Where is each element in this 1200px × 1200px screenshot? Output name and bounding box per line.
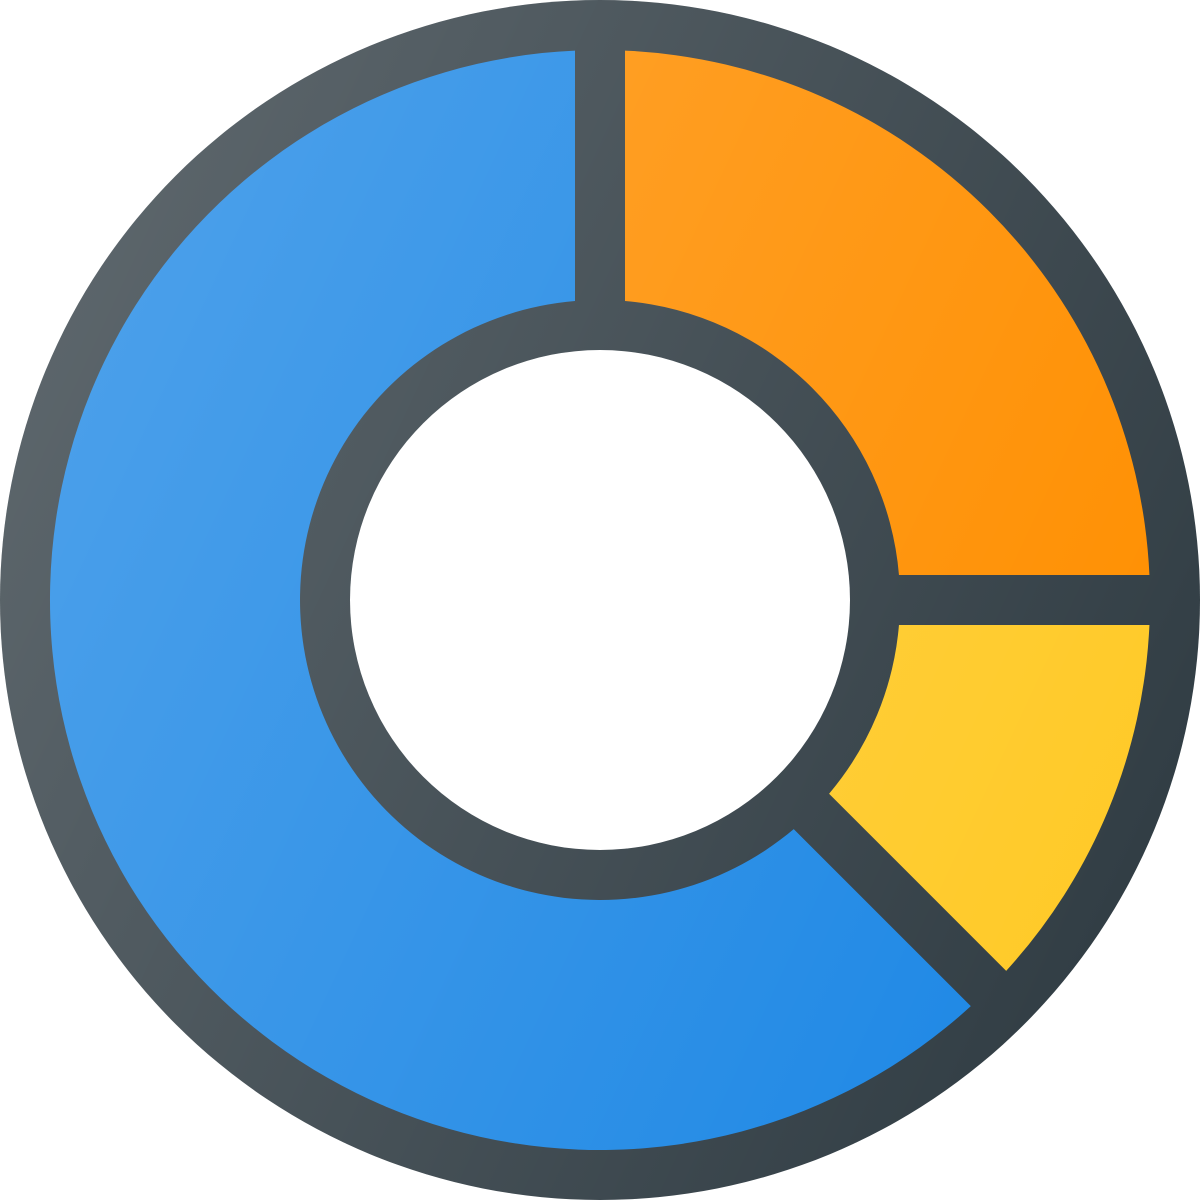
segment: blue, largest share <box>50 51 971 1150</box>
segment: orange, upper right <box>625 51 1149 575</box>
segment: yellow, lower right <box>829 625 1149 971</box>
center hole <box>350 350 850 850</box>
